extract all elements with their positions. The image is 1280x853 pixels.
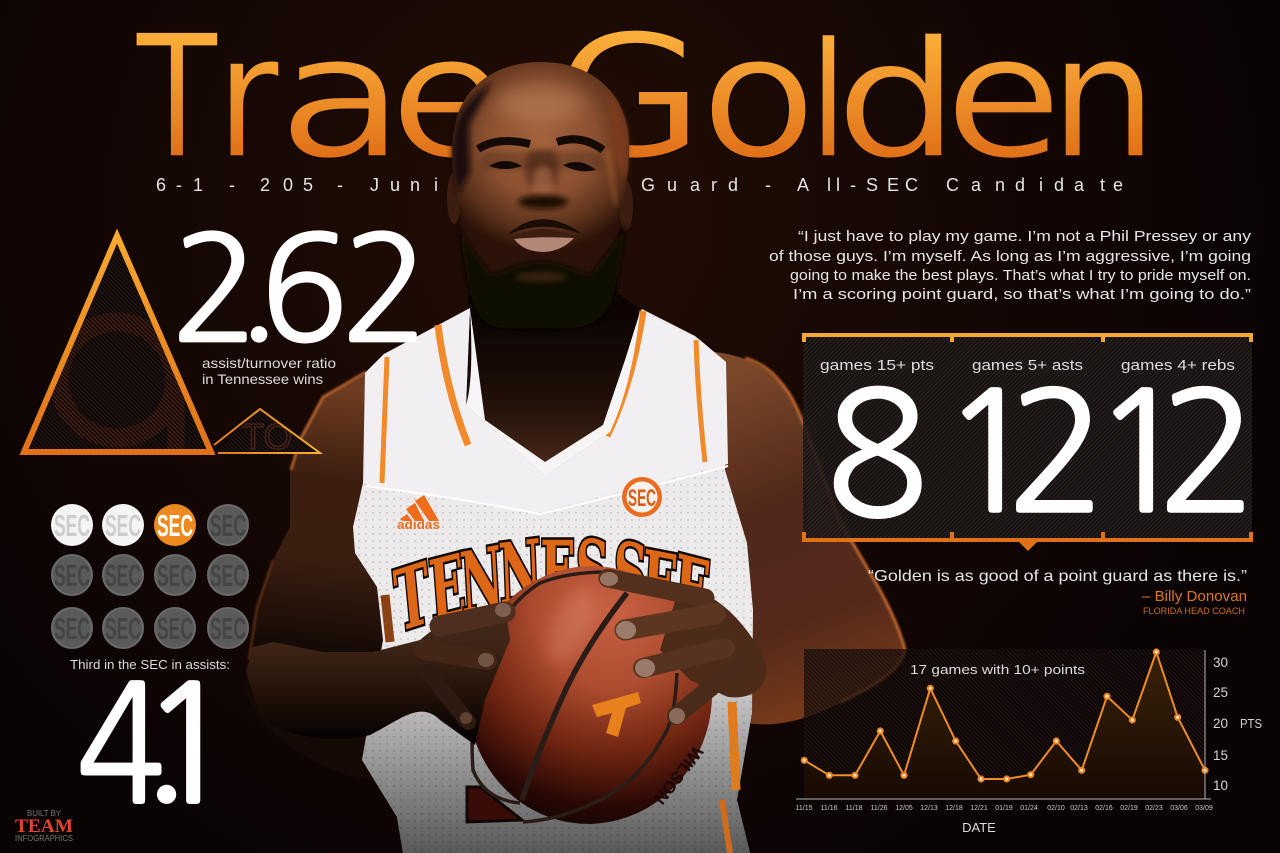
x axis labels: 12/13 (920, 805, 938, 812)
y axis labels: 10 (1213, 778, 1228, 793)
column: games 15+ pts: games 15+ pts (820, 357, 934, 374)
SEC icon 5 (52, 555, 92, 595)
SEC icon 9: SEC (54, 611, 90, 646)
chart points (802, 649, 1208, 782)
triangle: turnover share (214, 409, 320, 457)
chart line (804, 652, 1205, 779)
SEC icon 10: SEC (105, 611, 141, 646)
jersey orange trim (382, 311, 736, 853)
adidas logo (397, 495, 440, 532)
subtitle: - (337, 175, 343, 195)
stat caption (202, 355, 336, 387)
big stat 4.1: 1 (139, 664, 237, 826)
subtitle: - (765, 175, 771, 195)
jersey (353, 308, 753, 853)
SEC icon 10 (103, 608, 143, 648)
SEC icon 2: SEC (105, 508, 141, 543)
SEC icon 3 highlighted: SEC (157, 508, 193, 543)
title: T (136, 0, 218, 197)
x axis labels: 02/19 (1120, 805, 1138, 812)
x axis labels: 01/19 (995, 805, 1013, 812)
x axis labels: 11/16 (820, 805, 838, 812)
SEC icon 2 (102, 504, 144, 546)
x axis labels: 12/21 (970, 805, 988, 812)
y axis labels: PTS (1240, 717, 1262, 731)
subtitle: 205 (260, 175, 313, 195)
brows and eyes (478, 139, 605, 198)
column: games 15+ pts: 8 (825, 369, 929, 541)
y axis labels: 15 (1213, 748, 1228, 763)
column: games 5+ asts (940, 357, 1107, 535)
x axis labels: 03/06 (1170, 805, 1188, 812)
x axis labels: 02/16 (1095, 805, 1113, 812)
head (447, 62, 633, 335)
Team Infographics logo: INFOGRAPHICS (15, 833, 73, 843)
big stat 2.62: . (236, 211, 280, 357)
Team Infographics logo: BUILT BY (27, 809, 62, 818)
column: games 4+ rebs: 2 (1158, 370, 1258, 535)
SEC icon 8 (208, 555, 248, 595)
top bracket (802, 333, 1253, 342)
letter a watermark (59, 322, 176, 450)
column: games 4+ rebs: games 4+ rebs (1121, 357, 1235, 374)
line chart: points per game (796, 649, 1262, 835)
chart caption: 17 games with 10+ points (910, 662, 1086, 677)
mouth (509, 220, 580, 252)
stat caption: in Tennessee wins (202, 371, 323, 387)
coach quote: FLORIDA HEAD COACH (1143, 606, 1245, 616)
triangle: assist share (24, 236, 211, 452)
SEC icon 4: SEC (210, 508, 246, 543)
column: games 5+ asts: 1 (940, 370, 1040, 535)
neck (472, 270, 617, 335)
player photo illustration (246, 62, 905, 853)
title: d (835, 7, 960, 195)
right arm (715, 352, 905, 724)
SEC icon 6 (103, 555, 143, 595)
SEC icon 7 (155, 555, 195, 595)
player quote: of those guys. I’m myself. As long as I’m aggressive, I’m going (769, 248, 1251, 265)
title: o (701, 0, 817, 197)
y axis labels: 25 (1213, 685, 1228, 700)
SEC icon 9 (52, 608, 92, 648)
x axis labels: 02/13 (1070, 805, 1088, 812)
title: n (1050, 0, 1158, 197)
chart area fill (804, 652, 1205, 799)
subtitle: - (229, 175, 235, 195)
x axis title: DATE (962, 820, 996, 835)
x axis labels: 02/23 (1145, 805, 1163, 812)
big stat 4.1: . (141, 657, 190, 819)
SEC icon 8: SEC (210, 558, 246, 593)
TO watermark: TO (242, 416, 292, 457)
SEC icon 7: SEC (157, 558, 193, 593)
title: a (277, 0, 405, 197)
ball brand: WILSON (650, 743, 707, 808)
soul patch area (515, 272, 567, 282)
x axis labels: 01/24 (1020, 805, 1038, 812)
adidas logo: adidas (397, 518, 440, 532)
player quote: I’m a scoring point guard, so that’s what I’m going to do.” (793, 286, 1251, 303)
title: e (390, 0, 508, 197)
column: games 4+ rebs (1091, 357, 1258, 535)
y axis labels (1213, 655, 1262, 793)
basketball (451, 550, 729, 840)
column: games 5+ asts: games 5+ asts (972, 357, 1083, 374)
jersey number fragment (467, 787, 522, 822)
title: G (554, 0, 704, 197)
subtitle: All-SEC (797, 175, 918, 195)
y axis labels: 20 (1213, 716, 1228, 731)
SEC icon 12: SEC (210, 611, 246, 646)
big stat 2.62: 2 (171, 217, 259, 363)
column: games 5+ asts: 2 (1007, 370, 1107, 535)
big stat 4.1: 4 (77, 664, 165, 826)
SEC icon 3 highlighted (154, 504, 196, 546)
coach quote: – Billy Donovan (1142, 589, 1247, 605)
big stat 2.62: 2 (341, 217, 429, 363)
skull and face (452, 62, 629, 314)
SEC icon 1: SEC (54, 508, 90, 543)
coach quote (868, 568, 1247, 616)
dark temple hair (452, 82, 492, 195)
title: r (216, 0, 279, 197)
subtitle: - (510, 175, 516, 195)
title: e (944, 0, 1062, 197)
bottom bracket with pointer (802, 532, 1253, 551)
x axis labels: 11/18 (846, 805, 863, 812)
SEC jersey patch (622, 477, 662, 517)
x axis labels (796, 805, 1213, 812)
ears (447, 172, 633, 231)
player quote (769, 228, 1252, 303)
ball T logo (592, 692, 641, 737)
x axis labels: 12/05 (895, 805, 913, 812)
SEC team icons (51, 504, 248, 648)
SEC icon 1 (51, 504, 93, 546)
x axis labels: 02/10 (1047, 805, 1065, 812)
jersey white collar (466, 308, 640, 476)
left arm (246, 370, 410, 782)
SEC icon 12 (208, 608, 248, 648)
x axis labels: 11/15 (796, 805, 813, 812)
nose (518, 195, 568, 209)
TENNESSEE lettering: TENNESSEE (391, 522, 713, 653)
coach quote: “Golden is as good of a point guard as there is.” (868, 568, 1247, 585)
SEC icon 4 (208, 505, 248, 545)
SEC icon 5: SEC (54, 558, 90, 593)
title (136, 0, 1157, 197)
Team Infographics logo: TEAM (15, 816, 73, 837)
stat caption: assist/turnover ratio (202, 355, 336, 371)
neck and chest (466, 295, 645, 480)
panel: game counts (802, 333, 1258, 551)
y axis labels: 30 (1213, 655, 1228, 670)
SEC icon 11 (155, 608, 195, 648)
x axis labels: 12/18 (945, 805, 963, 812)
subtitle: Guard (641, 175, 738, 195)
player quote: “I just have to play my game. I’m not a Phil Pressey or any (798, 228, 1252, 245)
Team Infographics logo (15, 809, 73, 843)
subtitle: 6-1 (156, 175, 203, 195)
column: games 4+ rebs: 1 (1091, 370, 1191, 535)
SEC jersey patch: SEC (628, 485, 656, 512)
x axis labels: 11/26 (870, 805, 888, 812)
SEC icon 11: SEC (157, 611, 193, 646)
right hand (600, 572, 766, 724)
beard (458, 222, 626, 329)
SEC icon 6: SEC (105, 558, 141, 593)
left forearm and hand (246, 603, 511, 745)
subtitle: Junior (370, 175, 476, 195)
assists caption: Third in the SEC in assists: (70, 657, 230, 672)
player quote: going to make the best plays. That’s what I try to pride myself on. (790, 267, 1251, 284)
subtitle: Candidate (946, 175, 1123, 195)
x axis labels: 03/09 (1195, 805, 1213, 812)
big stat 2.62: 6 (260, 217, 348, 363)
title: l (808, 7, 848, 194)
